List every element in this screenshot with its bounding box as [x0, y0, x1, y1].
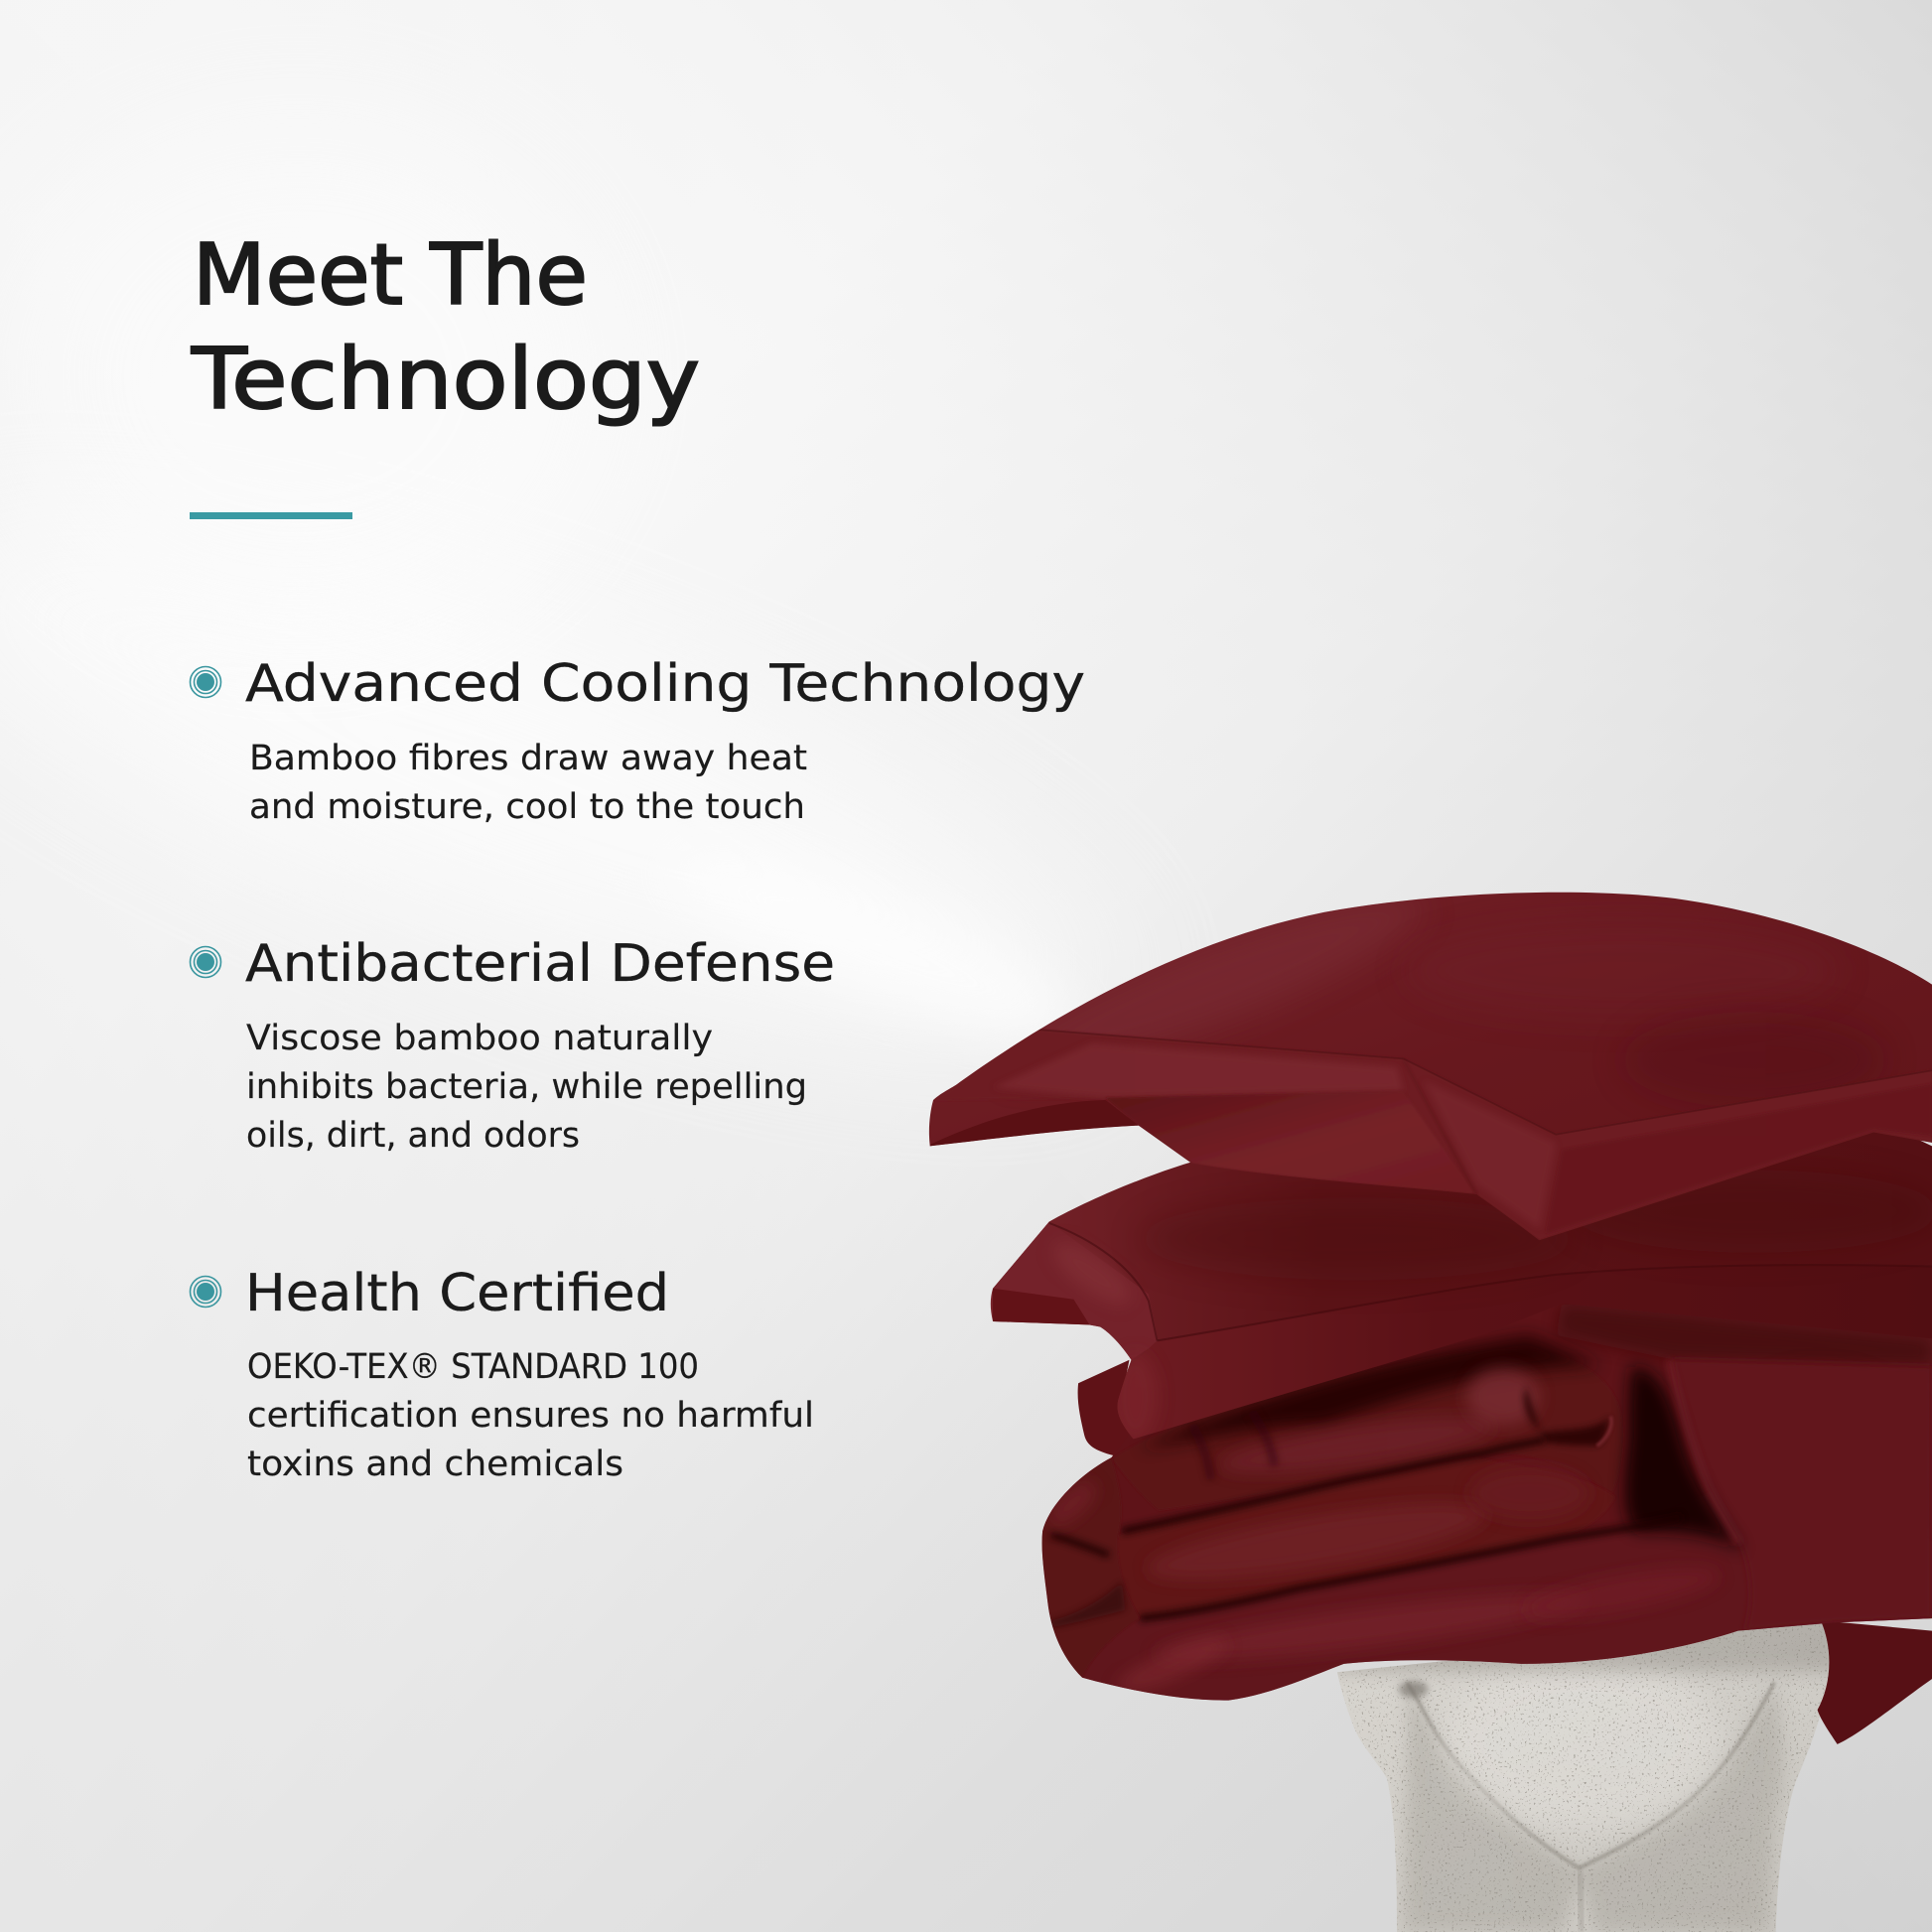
- description: and moisture, cool to the touch: [249, 787, 805, 827]
- title: Meet The: [193, 226, 588, 325]
- inner fold at pillow opening: [930, 1100, 1139, 1146]
- heading: Antibacterial Defense: [245, 934, 835, 994]
- duvet underside right: [1818, 1620, 1932, 1744]
- icon: target bullet: [191, 947, 220, 977]
- duvet left tab: [1078, 1360, 1133, 1455]
- crease beneath middle roll: [1140, 1517, 1682, 1618]
- description: Viscose bamboo naturally: [246, 1019, 713, 1058]
- left edge fold: [1042, 1457, 1140, 1678]
- heading: Advanced Cooling Technology: [245, 654, 1085, 714]
- lower fold: [1082, 1618, 1932, 1701]
- right duvet panel: [1672, 1359, 1932, 1631]
- upper roll shadow from pillow: [1139, 1335, 1602, 1449]
- upper roll: [1112, 1350, 1623, 1510]
- top pillow: [929, 866, 1932, 1240]
- fold core shadow: [1624, 1366, 1744, 1552]
- icon: target bullet: [191, 667, 220, 697]
- underside panel: [1105, 1091, 1476, 1194]
- lower pillow: [991, 1119, 1932, 1442]
- title: [191, 226, 700, 429]
- feature: advanced cooling: [191, 654, 1085, 827]
- seams: [1033, 1030, 1932, 1135]
- description: oils, dirt, and odors: [246, 1116, 580, 1156]
- upper roll dimple: [1524, 1387, 1610, 1446]
- heading: Health Certified: [245, 1264, 669, 1323]
- description: [246, 1019, 807, 1156]
- right fold edge highlight: [1668, 1360, 1740, 1543]
- lower pillow band: [1112, 1264, 1932, 1439]
- teal divider rule: [190, 512, 352, 519]
- folded duvet: [1041, 1301, 1932, 1701]
- description: certification ensures no harmful: [247, 1396, 814, 1436]
- description: toxins and chemicals: [247, 1445, 623, 1484]
- product illustration: burgundy bedding on stone bust: [929, 892, 1932, 1932]
- description: inhibits bacteria, while repelling: [246, 1067, 807, 1107]
- crease between upper and middle roll: [1122, 1440, 1544, 1531]
- lower pillow left flange: [993, 1222, 1159, 1360]
- description: [249, 739, 807, 827]
- flange band: [933, 1030, 1932, 1240]
- description: Bamboo fibres draw away heat: [249, 739, 807, 778]
- middle roll: [1118, 1457, 1615, 1617]
- stone bust: [1330, 1610, 1841, 1932]
- description: OEKO-TEX® STANDARD 100: [247, 1347, 699, 1387]
- icon: target bullet: [191, 1277, 220, 1307]
- feature: health certified: [191, 1264, 814, 1484]
- feature: antibacterial defense: [191, 934, 835, 1156]
- upper roll highlights: [1229, 1418, 1484, 1472]
- description: [247, 1347, 814, 1484]
- title: Technology: [191, 331, 700, 429]
